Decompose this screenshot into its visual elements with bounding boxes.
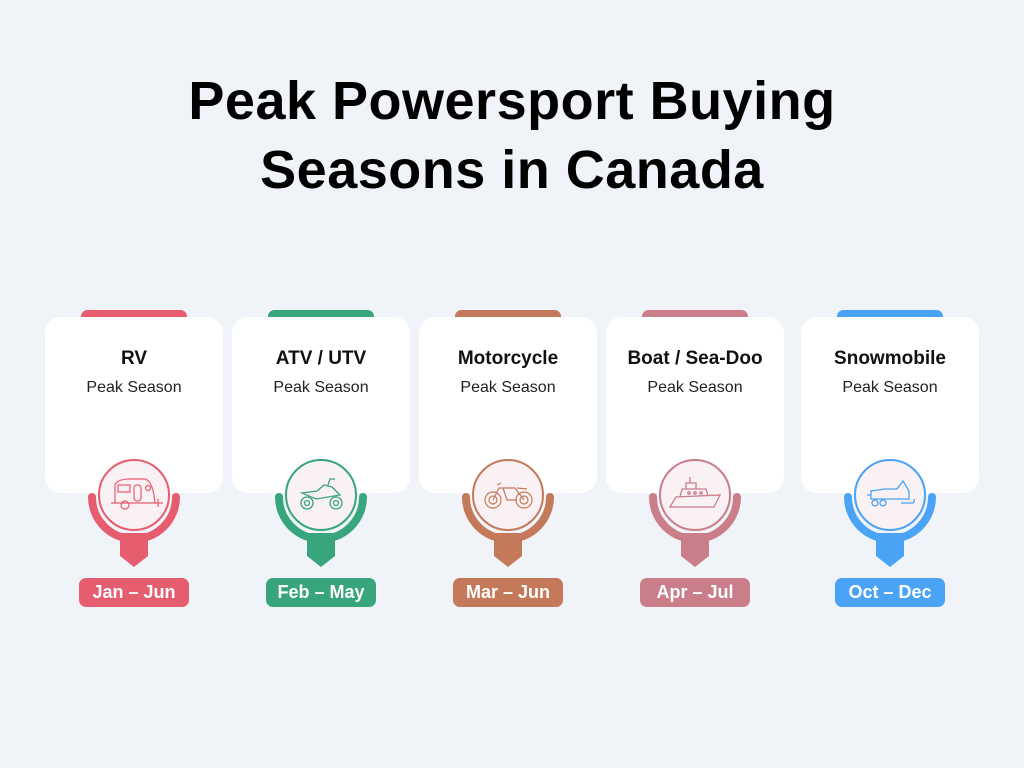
date pill [79,578,189,607]
column: Snowmobile [801,310,979,607]
title: Peak Powersport Buying [188,71,836,131]
icon: snowmobile badge [844,459,936,567]
date pill: Oct – Dec [848,582,932,602]
accent bar [455,310,561,323]
card [419,317,597,493]
date pill: Feb – May [277,582,365,602]
heading: RV [121,348,147,369]
column: ATV / UTV [232,310,410,607]
date pill [835,578,945,607]
card [232,317,410,493]
icon: motorcycle badge [462,459,554,567]
date pill: Jan – Jun [92,582,176,602]
date pill: Apr – Jul [656,582,734,602]
column: RV [45,310,223,607]
column: Motorcycle [419,310,597,607]
subtitle: Peak Season [647,379,743,396]
icon: boat badge [649,459,741,567]
heading: Boat / Sea-Doo [627,348,763,369]
card [45,317,223,493]
heading: ATV / UTV [276,348,366,369]
accent bar [81,310,187,323]
subtitle: Peak Season [842,379,938,396]
heading: Snowmobile [834,348,946,369]
subtitle: Peak Season [273,379,369,396]
title: Seasons in Canada [260,140,764,200]
title [188,71,836,200]
subtitle: Peak Season [460,379,556,396]
date pill [453,578,563,607]
card [606,317,784,493]
heading: Motorcycle [458,348,558,369]
card [801,317,979,493]
column: Boat / Sea-Doo [606,310,784,607]
accent bar [642,310,748,323]
accent bar [837,310,943,323]
date pill [266,578,376,607]
subtitle: Peak Season [86,379,182,396]
icon: ATV badge [275,459,367,567]
accent bar [268,310,374,323]
date pill: Mar – Jun [466,582,550,602]
date pill [640,578,750,607]
icon: RV badge [88,459,180,567]
